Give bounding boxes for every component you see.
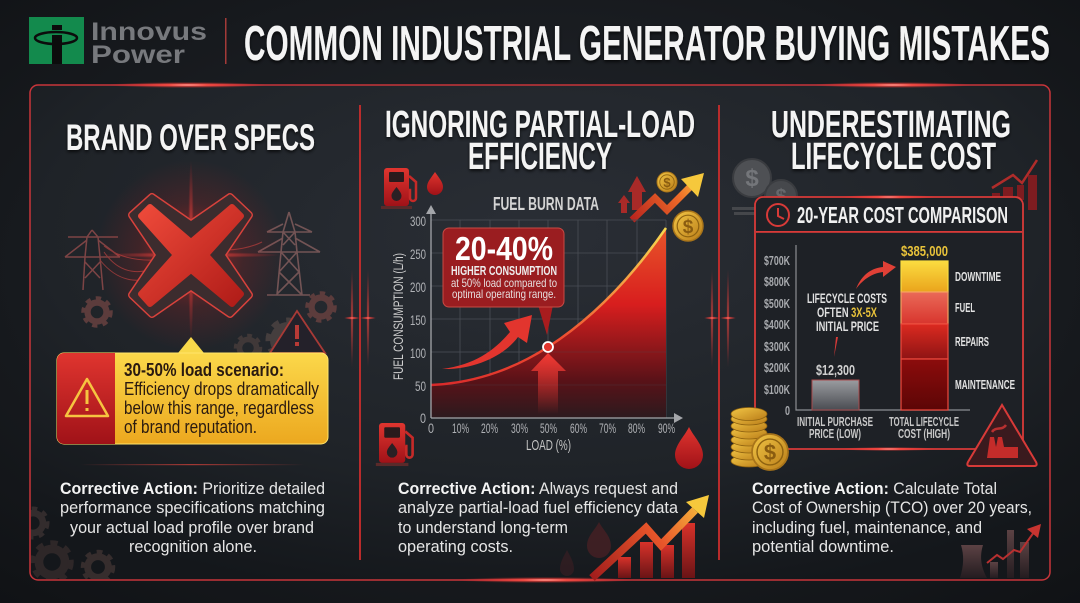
y axis labels: 0 — [420, 410, 426, 426]
corrective action text: Cost of Ownership (TCO) over 20 years, — [752, 498, 1032, 517]
corrective action text: including fuel, maintenance, and — [752, 518, 982, 537]
icon: rising arrow and coins: $ — [663, 175, 671, 190]
main panel — [19, 82, 1050, 583]
icon: gears — [83, 293, 335, 360]
icon: small rising chart — [992, 160, 1037, 210]
annotation: 3x-5x — [807, 290, 887, 334]
corrective action text: Corrective Action: Prioritize detailed — [60, 479, 325, 498]
segment labels — [955, 269, 1015, 392]
logo wordmark: Power — [91, 41, 185, 69]
x axis labels: 30% — [511, 420, 528, 436]
logo wordmark: Innovus — [91, 18, 207, 46]
callout: load scenario — [57, 337, 328, 444]
icon: clock — [767, 204, 789, 226]
logo wordmark — [91, 18, 207, 69]
small connector — [834, 337, 838, 357]
arrow to total bar — [856, 261, 896, 289]
segment labels: DOWNTIME — [955, 269, 1001, 284]
axes — [796, 245, 970, 410]
corrective action text: Corrective Action: Always request and — [398, 479, 678, 498]
x axis labels: 90% — [658, 420, 675, 436]
icon: mini factory chart — [960, 524, 1041, 578]
icon: red X — [96, 160, 286, 350]
callout text — [124, 360, 319, 437]
up arrow at 50% — [531, 353, 566, 414]
corrective action text: potential downtime. — [752, 537, 894, 556]
axes — [431, 210, 678, 418]
segment labels: MAINTENANCE — [955, 377, 1015, 392]
y axis labels: $100K — [764, 382, 790, 397]
icon: grey coins: $ — [775, 186, 787, 208]
annotation: 3x-5x: LIFECYCLE COSTS — [807, 290, 887, 306]
chart card — [755, 195, 1023, 451]
curve — [431, 228, 666, 385]
corrective action text — [60, 479, 325, 556]
heading: BRAND OVER SPECS — [66, 117, 315, 158]
icon: fuel pump bottom — [376, 423, 413, 466]
panel frame — [30, 85, 1050, 580]
y axis labels: $500K — [764, 296, 790, 311]
icon: grey coins: $ — [745, 165, 759, 192]
y axis labels: 100 — [410, 345, 426, 361]
icon: gold coin stack: $ — [764, 440, 776, 465]
axis title y: FUEL CONSUMPTION (L/h) — [390, 253, 406, 380]
panel: partial-load efficiency — [376, 104, 709, 578]
annotation: 3x-5x: OFTEN 3X-5X — [817, 304, 877, 320]
y axis labels: $700K — [764, 253, 790, 268]
corrective action text: to understand long-term — [398, 518, 568, 537]
line chart: fuel burn — [390, 205, 683, 454]
heading — [385, 104, 695, 178]
callout text: of brand reputation. — [124, 417, 257, 437]
x axis labels: COST (HIGH) — [898, 426, 950, 441]
axis title x: LOAD (%) — [526, 437, 571, 454]
corrective action text: operating costs. — [398, 537, 513, 556]
x axis labels: 50% — [540, 420, 557, 436]
icon: gold coin stack — [731, 408, 788, 470]
panel: brand over specs — [19, 117, 335, 582]
icon: warning triangle — [66, 379, 108, 416]
segment labels: REPAIRS — [955, 334, 989, 349]
icon: right pylon — [225, 212, 320, 295]
callout: 20-40% — [443, 228, 564, 335]
x axis labels: 20% — [481, 420, 498, 436]
x axis labels: 0 — [428, 420, 434, 436]
area under curve — [431, 228, 666, 418]
heading: EFFICIENCY — [468, 136, 612, 178]
x axis labels: TOTAL LIFECYCLE — [889, 414, 959, 429]
icon: dim warning triangle — [270, 311, 325, 353]
y axis labels: $800K — [764, 274, 790, 289]
bar: initial purchase price — [812, 362, 859, 410]
corrective action text — [752, 479, 1032, 556]
icon: fuel pump top — [381, 168, 416, 209]
icon: rising arrow and coins: $ — [683, 217, 694, 238]
y axis labels: $400K — [764, 317, 790, 332]
icon: drop top — [427, 172, 443, 195]
y axis labels: 150 — [410, 312, 426, 328]
y axis labels: 300 — [410, 213, 426, 229]
y axis labels — [764, 253, 790, 418]
heading: IGNORING PARTIAL-LOAD — [385, 104, 695, 146]
logo mark — [29, 17, 84, 64]
x axis labels: 70% — [599, 420, 616, 436]
chart subtitle: FUEL BURN DATA — [493, 194, 599, 214]
y axis labels: 200 — [410, 279, 426, 295]
corrective action text: performance specifications matching — [60, 498, 325, 517]
y axis labels: $300K — [764, 339, 790, 354]
callout text: below this range, regardless — [124, 398, 314, 418]
callout text: Efficiency drops dramatically — [124, 379, 319, 399]
icon: rising arrow and coins — [618, 172, 704, 241]
corrective action text: analyze partial-load fuel efficiency data — [398, 498, 679, 517]
y axis labels: 0 — [785, 403, 790, 418]
bar: initial purchase price: $12,300 — [816, 362, 855, 379]
y axis labels — [410, 213, 426, 426]
callout: 20-40%: 20-40% — [455, 230, 553, 267]
x axis labels — [428, 420, 675, 436]
marker at 50% load — [543, 342, 553, 352]
x axis labels — [797, 414, 959, 441]
y axis labels: $200K — [764, 360, 790, 375]
callout: 20-40%: HIGHER CONSUMPTION — [451, 263, 557, 278]
y axis labels: 250 — [410, 246, 426, 262]
annotation: 3x-5x: INITIAL PRICE — [816, 318, 879, 334]
callout: 20-40%: optimal operating range. — [452, 287, 556, 301]
callout text: 30-50% load scenario: — [124, 360, 284, 380]
bar: total lifecycle cost — [901, 261, 948, 410]
icon: dim drops — [560, 522, 611, 576]
icon: grey coins — [732, 159, 797, 215]
bar total value: $385,000 — [901, 243, 948, 260]
callout: 20-40%: at 50% load compared to — [451, 276, 557, 290]
swoosh arrow — [442, 315, 532, 369]
corrective action text: recognition alone. — [129, 537, 257, 556]
panel: lifecycle cost — [731, 104, 1041, 578]
corrective action text: your actual load profile over brand — [70, 518, 314, 537]
icon: bottom-left gears — [31, 506, 116, 579]
icon: drop bottom — [675, 427, 703, 469]
x axis labels: 10% — [452, 420, 469, 436]
icon: bottom rising bars — [592, 495, 709, 578]
x axis labels: 80% — [628, 420, 645, 436]
x axis labels: INITIAL PURCHASE — [797, 414, 873, 429]
y axis labels: 50 — [415, 378, 426, 394]
x axis labels: PRICE (LOW) — [809, 426, 861, 441]
icon: left pylon — [65, 230, 172, 290]
corrective action text: Corrective Action: Calculate Total — [752, 479, 997, 498]
heading — [771, 104, 1011, 178]
header logo — [29, 17, 207, 69]
x axis labels: 60% — [570, 420, 587, 436]
corrective action text — [398, 479, 679, 556]
icon: factory warning triangle — [967, 405, 1037, 466]
segment labels: FUEL — [955, 300, 975, 315]
